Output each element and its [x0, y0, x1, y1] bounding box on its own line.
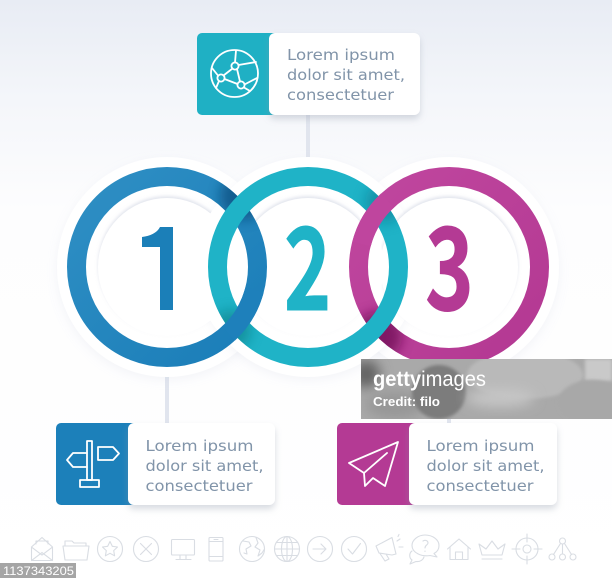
- icon: check in circle: [342, 536, 366, 562]
- callout: lower-left blue card: [56, 423, 275, 505]
- callout: lower-right magenta card: consectetuer: [426, 477, 534, 495]
- number 1: [142, 227, 173, 310]
- icon: folder: [63, 541, 89, 560]
- callout: lower-left blue card: consectetuer: [146, 477, 253, 495]
- image id tag: [0, 563, 76, 578]
- callout: top teal card: dolor sit amet,: [287, 66, 405, 84]
- watermark band: gettyimages: [373, 367, 486, 391]
- white halos behind the rings: [57, 157, 559, 377]
- icon: star in circle: [98, 536, 122, 562]
- callout: lower-left blue card: dolor sit amet,: [146, 457, 264, 475]
- icon: earth globe: [240, 536, 264, 562]
- connector lines: [165, 113, 451, 425]
- icon: speech bubbles: [410, 535, 439, 564]
- icon: crown: [479, 541, 505, 559]
- icon: megaphone: [376, 534, 403, 561]
- icon: network globe: [211, 50, 258, 97]
- icon row: [32, 534, 576, 564]
- icon: paper plane: [349, 442, 398, 486]
- number 1: 1: [141, 178, 189, 343]
- icon: house: [448, 539, 470, 560]
- callout: lower-right magenta card: Lorem ipsum: [426, 437, 534, 455]
- icon: target: [512, 534, 542, 564]
- icon: signpost: [67, 441, 119, 487]
- icon: open envelope: [32, 538, 52, 560]
- watermark band: [361, 359, 612, 419]
- number 3: 3: [425, 178, 474, 343]
- ring 3: magenta: [354, 176, 540, 360]
- number 2: 2: [284, 179, 331, 344]
- callout: top teal card: Lorem ipsum: [287, 46, 395, 64]
- ring 2: teal: [211, 176, 405, 358]
- icon: monitor: [172, 540, 194, 560]
- callout: lower-left blue card: Lorem ipsum: [146, 437, 254, 455]
- icon: grid globe: [274, 536, 300, 562]
- ring 3 upper overlap arc: [362, 200, 388, 244]
- icon: phone: [209, 538, 223, 561]
- image id tag: 1137343205: [3, 566, 74, 578]
- callout: top teal card: consectetuer: [287, 86, 395, 104]
- callout: lower-right magenta card: dolor sit amet,: [426, 457, 544, 475]
- icon: arrow in circle: [308, 536, 332, 562]
- callout: lower-right magenta card: [337, 423, 557, 505]
- icon: network tree: [549, 538, 576, 560]
- ring 1 lower overlap arc: [228, 290, 254, 334]
- watermark band: Credit: filo: [373, 394, 440, 409]
- ring 1: blue: [76, 172, 268, 358]
- callout: top teal card: [197, 33, 420, 115]
- icon: cross in circle: [134, 536, 158, 562]
